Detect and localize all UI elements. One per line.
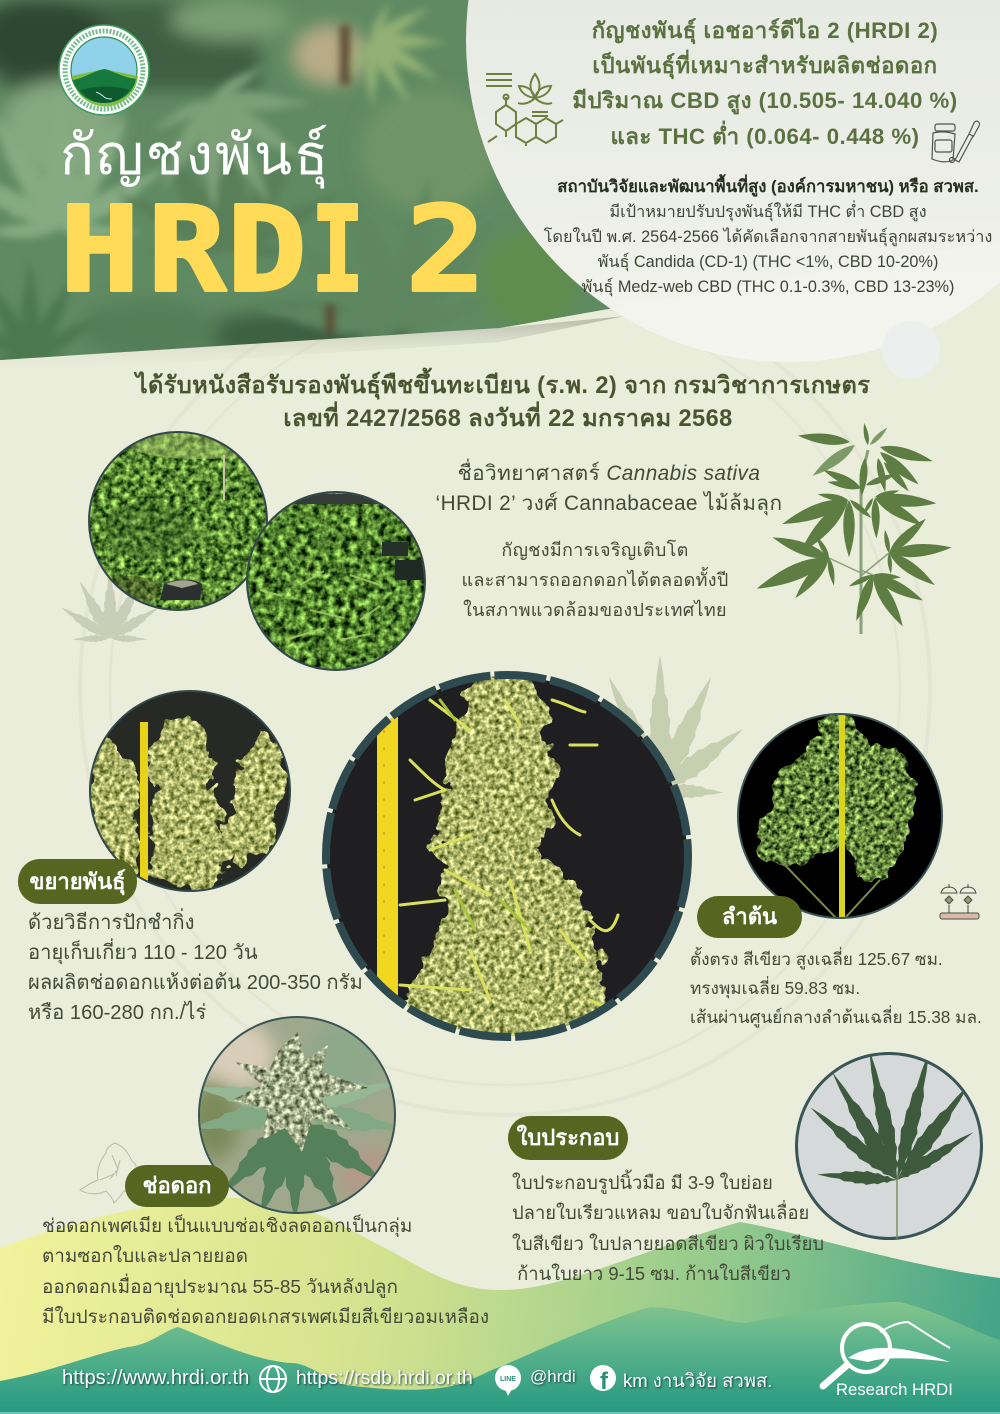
- label: propagation: [18, 859, 137, 904]
- research logo text: Research HRDI: [836, 1380, 953, 1399]
- photo: field plants 1: [88, 431, 270, 611]
- intro heading: [572, 18, 958, 149]
- icon: CBD bottle and dropper: [932, 121, 979, 162]
- icon: line: LINE: [500, 1376, 516, 1383]
- intro description: มีเป้าหมายปรับปรุงพันธุ์ให้มี THC ต่ำ CBD สูง: [609, 203, 927, 221]
- growth note: และสามารถออกดอกได้ตลอดทั้งปี: [461, 570, 729, 590]
- leaf text: ใบประกอบรูปนิ้วมือ มี 3-9 ใบย่อย: [512, 1172, 773, 1193]
- flower text: ช่อดอกเพศเมีย เป็นแบบช่อเชิงลดออกเป็นกลุ่ม: [42, 1216, 412, 1237]
- title HRDI 2: R: [148, 182, 226, 319]
- label: flower: [125, 1165, 229, 1207]
- icon: facebook: f: [600, 1368, 609, 1395]
- intro description: พันธุ์ Medz-web CBD (THC 0.1-0.3%, CBD 13-23%): [582, 278, 954, 296]
- flower text: มีใบประกอบติดช่อดอกยอดเกสรเพศเมียสีเขียวอมเหลือง: [42, 1307, 489, 1328]
- watermark leaf behind main photo: [572, 655, 748, 800]
- title HRDI 2: [60, 181, 486, 319]
- propagation text: [28, 908, 363, 1024]
- icon: molecule with leaf: [486, 74, 563, 146]
- title HRDI 2: D: [227, 181, 307, 319]
- footer link: line: @hrdi: [530, 1367, 576, 1386]
- certification heading: [134, 368, 870, 432]
- intro description: โดยในปี พ.ศ. 2564-2566 ได้คัดเลือกจากสายพันธุ์ลูกผสมระหว่าง: [544, 228, 992, 246]
- intro white circle panel: [466, 0, 1000, 362]
- hero photo: blurred cannabis leaves: [0, 0, 610, 360]
- growth note: กัญชงมีการเจริญเติบโต: [501, 540, 689, 560]
- icon: globe: [260, 1366, 286, 1392]
- propagation text: หรือ 160-280 กก./ไร่: [28, 1002, 206, 1024]
- growth note: ในสภาพแวดล้อมของประเทศไทย: [463, 600, 727, 620]
- intro description: สถาบันวิจัยและพัฒนาพื้นที่สูง (องค์การมหาชน) หรือ สวพส.: [557, 177, 979, 196]
- leaf text: [512, 1170, 824, 1284]
- stem text: เส้นผ่านศูนย์กลางลำต้นเฉลี่ย 15.38 มล.: [690, 1007, 982, 1027]
- propagation text: ผลผลิตช่อดอกแห้งต่อต้น 200-350 กรัม: [28, 972, 363, 994]
- growth note: [461, 540, 729, 620]
- footer link: facebook: km งานวิจัย สวพส.: [623, 1370, 772, 1391]
- label: stem: [697, 896, 802, 938]
- scientific name: ชื่อวิทยาศาสตร์ Cannabis sativa: [458, 462, 760, 485]
- label: stem: ลำต้น: [722, 904, 777, 929]
- photo: main flower stalk with ruler: [326, 668, 688, 1045]
- title HRDI 2: 2: [406, 181, 486, 319]
- title HRDI 2: I: [311, 181, 364, 319]
- scientific name: ‘HRDI 2’ วงศ์ Cannabaceae ไม้ล้มลุก: [436, 492, 782, 515]
- stem text: ทรงพุมเฉลี่ย 59.83 ซม.: [690, 978, 860, 998]
- photo: flower close up: [198, 1016, 396, 1214]
- small decorative circle: [882, 321, 940, 379]
- hero lower edge shadow: [0, 316, 625, 374]
- propagation text: อายุเก็บเกี่ยว 110 - 120 วัน: [28, 942, 258, 964]
- leaf text: ก้านใบยาว 9-15 ซม. ก้านใบสีเขียว: [517, 1263, 791, 1284]
- icon: facebook: [590, 1365, 616, 1395]
- leaf text: ใบสีเขียว ใบปลายยอดสีเขียว ผิวใบเรียบ: [512, 1233, 824, 1254]
- icon: research magnifier logo: [823, 1322, 950, 1386]
- photo: three flower stalks with ruler: [85, 690, 291, 892]
- intro heading: เป็นพันธุ์ที่เหมาะสำหรับผลิตช่อดอก: [592, 53, 938, 78]
- leaf text: ปลายใบเรียวแหลม ขอบใบจักฟันเลื่อย: [512, 1202, 809, 1223]
- mountains: [0, 1198, 1000, 1414]
- stem text: [690, 946, 982, 1028]
- label: leaf: ใบประกอบ: [517, 1125, 619, 1150]
- intro heading: มีปริมาณ CBD สูง (10.505- 14.040 %): [572, 88, 958, 113]
- icon: bud outline: [80, 1143, 136, 1203]
- icon: line: [495, 1365, 521, 1396]
- flower text: [42, 1214, 489, 1328]
- photo: compound leaf: [795, 1048, 983, 1240]
- subtitle: กัญชงพันธุ์: [60, 123, 330, 186]
- photo: whole plant on black: [737, 705, 944, 920]
- flower text: ออกดอกเมื่ออายุประมาณ 55-85 วันหลังปลูก: [42, 1277, 398, 1298]
- stem text: ตั้งตรง สีเขียว สูงเฉลี่ย 125.67 ซม.: [690, 949, 943, 969]
- photo: field plants 2: [246, 491, 427, 671]
- label: leaf: [508, 1116, 628, 1160]
- intro heading: กัญชงพันธุ์ เอชอาร์ดีไอ 2 (HRDI 2): [592, 18, 938, 43]
- certification heading: ได้รับหนังสือรับรองพันธุ์พืชขึ้นทะเบียน (ร.พ. 2) จาก กรมวิชาการเกษตร: [136, 373, 870, 399]
- footer link: research database: https://rsdb.hrdi.or.th: [296, 1367, 473, 1389]
- intro description: [544, 174, 992, 296]
- title HRDI 2: H: [60, 181, 140, 319]
- illustration: hemp plant: [754, 423, 952, 634]
- intro heading: และ THC ต่ำ (0.064- 0.448 %): [610, 124, 920, 149]
- logo: [59, 25, 149, 115]
- scientific name: [436, 458, 782, 516]
- watermark leaf left: [58, 570, 162, 643]
- label: flower: ช่อดอก: [143, 1173, 211, 1198]
- label: propagation: ขยายพันธุ์: [29, 869, 126, 894]
- certification heading: เลขที่ 2427/2568 ลงวันที่ 22 มกราคม 2568: [283, 406, 733, 432]
- propagation text: ด้วยวิธีการปักชำกิ่ง: [28, 912, 194, 934]
- intro description: พันธุ์ Candida (CD-1) (THC <1%, CBD 10-20%): [598, 253, 938, 271]
- icon: grow lamps: [940, 884, 979, 919]
- flower text: ตามซอกใบและปลายยอด: [42, 1246, 248, 1267]
- watermark emblem: [80, 265, 930, 1115]
- footer link: website: https://www.hrdi.or.th: [62, 1367, 249, 1389]
